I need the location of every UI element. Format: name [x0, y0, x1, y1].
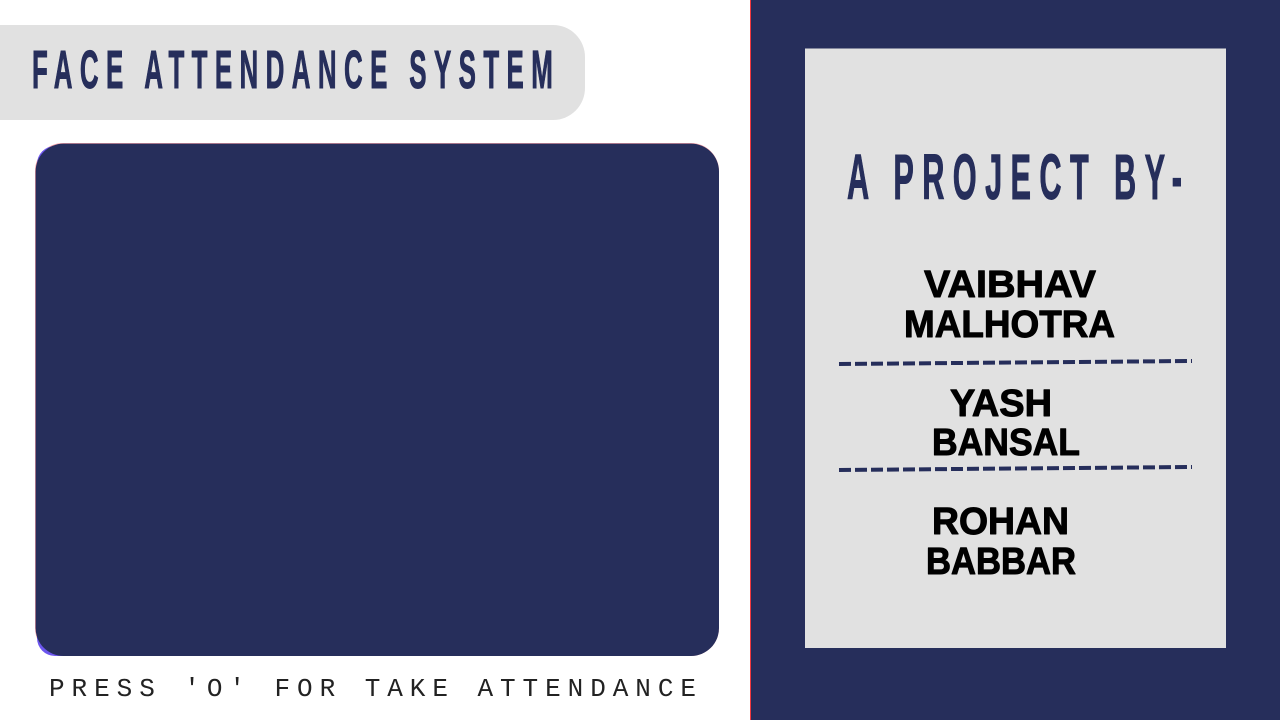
- name: Vaibhav Malhotra: VAIBHAV: [924, 264, 1097, 306]
- name: Yash Bansal: YASH: [950, 383, 1052, 425]
- name: Rohan Babbar: ROHAN: [932, 501, 1069, 543]
- instruction caption: PRESS 'O' FOR TAKE ATTENDANCE: [49, 674, 696, 704]
- name: Rohan Babbar: [926, 501, 1076, 583]
- name: Yash Bansal: BANSAL: [932, 422, 1080, 464]
- name: Vaibhav Malhotra: [904, 264, 1115, 346]
- title: FACE ATTENDANCE SYSTEM: [32, 40, 553, 99]
- credits heading: A PROJECT BY-: [847, 142, 1182, 213]
- credits card: [805, 48, 1226, 648]
- title banner: [0, 25, 585, 120]
- divider 2: [839, 467, 1192, 470]
- camera panel: [35, 143, 719, 656]
- right sidebar: [750, 0, 1280, 720]
- divider 1: [839, 361, 1192, 364]
- name: Yash Bansal: [932, 383, 1080, 464]
- name: Rohan Babbar: BABBAR: [926, 541, 1076, 583]
- name: Vaibhav Malhotra: MALHOTRA: [904, 304, 1115, 346]
